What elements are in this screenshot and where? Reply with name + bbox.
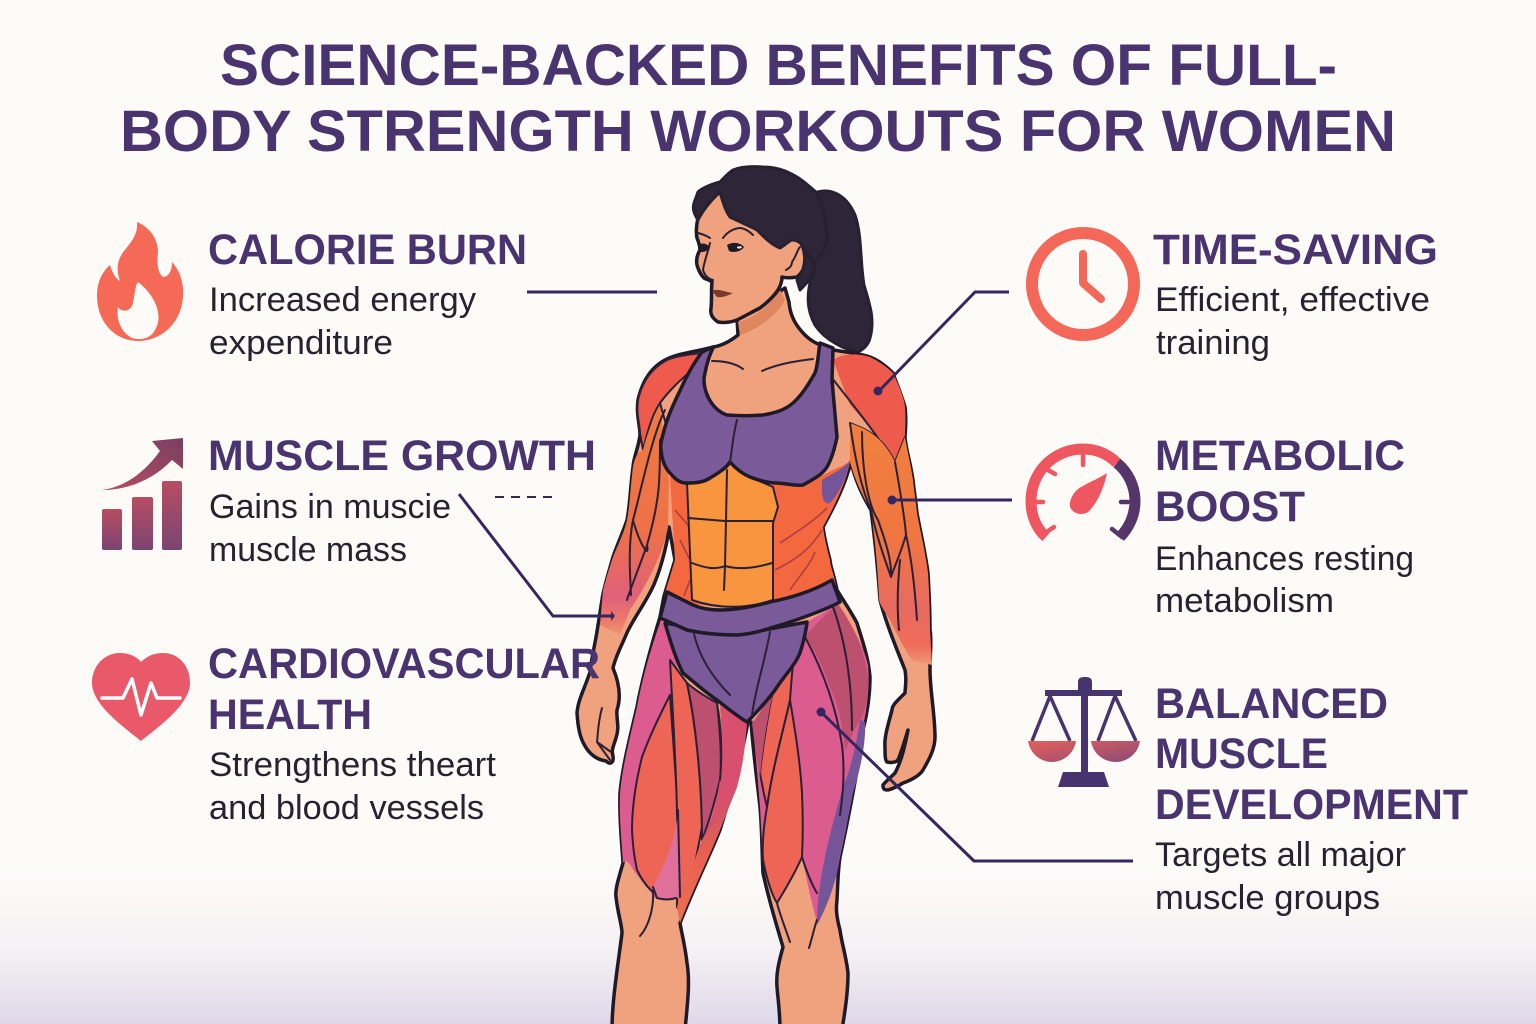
icon: balance scales [1028,677,1140,787]
neck shadow [738,290,785,335]
right shoulder muscle [833,354,905,464]
benefit: calorie burn: CALORIE BURN [208,226,527,274]
body silhouette [577,288,935,1024]
benefit: balanced muscle development [1155,680,1468,917]
benefit: metabolic boost: Enhances resting [1155,540,1414,578]
facial features [698,228,800,297]
benefit: balanced muscle development: Targets all major [1155,836,1406,874]
left arm muscles [600,405,669,635]
benefit: cardiovascular health [208,640,600,827]
left thigh muscles [620,620,681,898]
benefit: balanced muscle development: BALANCED [1155,680,1388,728]
abdominals [687,462,778,607]
right thigh muscles [753,604,869,923]
sports bra [661,343,837,485]
benefit: time-saving: training [1156,324,1270,362]
icon: flame [97,222,183,341]
hand details [597,708,611,760]
benefit: calorie burn: expenditure [209,324,393,362]
benefit: calorie burn [208,226,527,362]
benefit: muscle growth [208,432,596,569]
benefit: cardiovascular health: Strengthens theart [209,746,497,784]
benefit: time-saving [1153,226,1438,362]
waistband [660,580,840,635]
title: BODY STRENGTH WORKOUTS FOR WOMEN [120,99,1396,164]
benefit: metabolic boost: METABOLIC [1155,432,1405,480]
benefit: balanced muscle development: DEVELOPMENT [1155,781,1468,829]
lat [822,460,850,503]
face and hair [696,190,805,322]
briefs [665,622,807,722]
left shoulder muscle [637,353,700,450]
title [120,33,1396,164]
icon: heart with pulse [92,653,190,741]
benefit: calorie burn: Increased energy [209,281,476,319]
benefit: balanced muscle development: MUSCLE [1155,730,1328,778]
benefit: muscle growth: MUSCLE GROWTH [208,432,596,480]
icon: speedometer [1031,449,1135,537]
ponytail [808,191,872,352]
benefit: metabolic boost: BOOST [1155,483,1305,531]
benefit: time-saving: Efficient, effective [1155,281,1430,319]
connector: balanced muscle development [816,708,1133,861]
torso side muscles [664,462,850,606]
benefit: metabolic boost: metabolism [1155,582,1334,620]
connector: calorie burn [527,290,657,294]
benefit: cardiovascular health: and blood vessels [209,789,484,827]
benefit: cardiovascular health: CARDIOVASCULAR [208,640,600,688]
benefit: muscle growth: Gains in muscie [209,488,451,526]
benefit: muscle growth: muscle mass [209,531,407,569]
benefit: cardiovascular health: HEALTH [208,691,372,739]
connector: muscle growth [459,494,615,621]
connector: metabolic boost [888,496,1012,504]
benefit: time-saving: TIME-SAVING [1153,226,1438,274]
benefit: metabolic boost [1155,432,1414,620]
title: SCIENCE-BACKED BENEFITS OF FULL- [220,33,1337,98]
benefit: balanced muscle development: muscle groups [1155,879,1380,917]
icon: growth chart [102,438,183,550]
icon: clock [1032,233,1134,335]
collarbones [712,359,813,371]
anatomical figure [577,167,935,1024]
right arm muscles [850,423,932,665]
connector: time-saving [874,292,1009,396]
